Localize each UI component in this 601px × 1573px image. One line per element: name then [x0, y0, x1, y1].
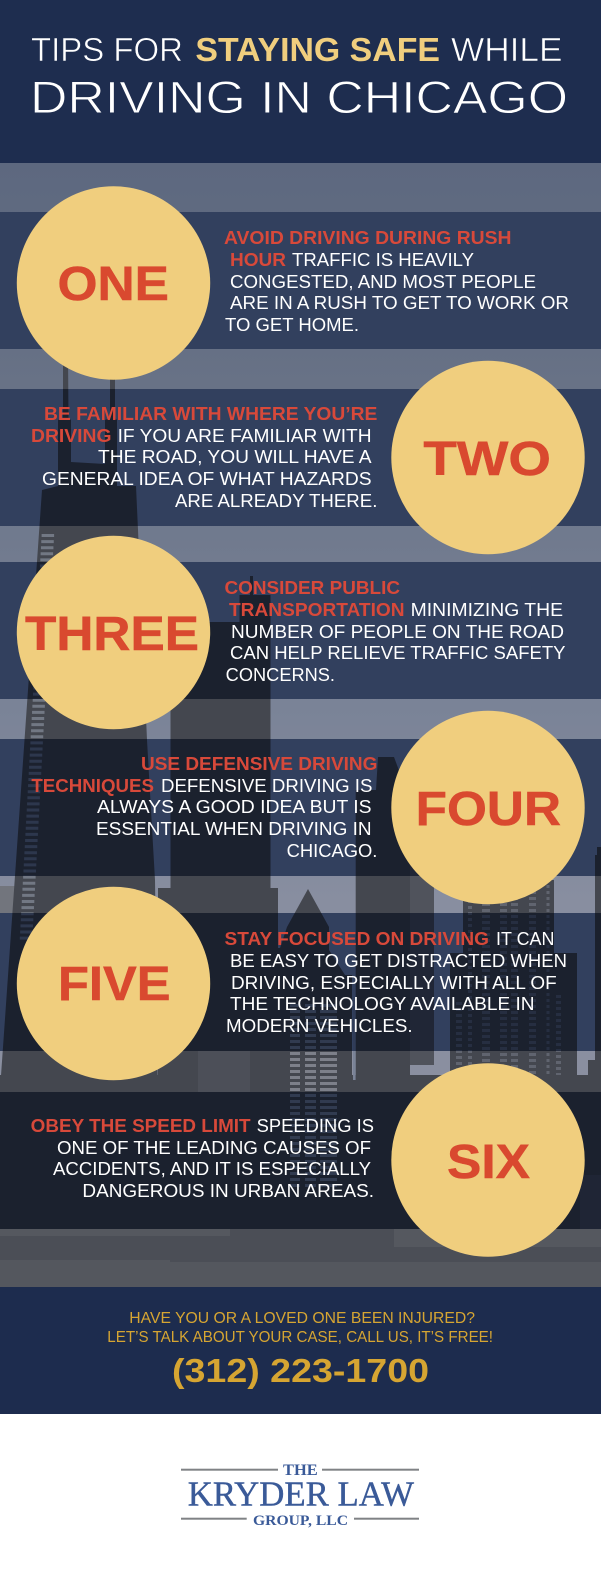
text: tip five: BE EASY TO GET DISTRACTED WHEN [230, 951, 567, 971]
logo [181, 1462, 419, 1529]
text: tip three: MINIMIZING THE [411, 600, 563, 620]
text: tip one: HOUR [230, 250, 286, 270]
text: tip one: TRAFFIC IS HEAVILY [292, 250, 474, 270]
text: tip four [31, 754, 377, 861]
text: tip four: DEFENSIVE DRIVING IS [161, 776, 372, 796]
text: tip two: ARE ALREADY THERE. [175, 491, 377, 511]
call to action text: HAVE YOU OR A LOVED ONE BEEN INJURED? [129, 1310, 475, 1327]
text: tip one: ARE IN A RUSH TO GET TO WORK OR [230, 293, 569, 313]
text: tip three: TRANSPORTATION [229, 600, 405, 620]
right cluster windows [459, 885, 558, 1075]
text: tip six: ONE OF THE LEADING CAUSES OF [57, 1138, 371, 1158]
text: tip two: IF YOU ARE FAMILIAR WITH [118, 426, 372, 446]
badge: five [17, 887, 210, 1080]
badge: four: FOUR [416, 783, 561, 836]
badge: six: SIX [447, 1136, 530, 1189]
text: tip six: OBEY THE SPEED LIMIT [31, 1116, 251, 1136]
text: tip one: TO GET HOME. [225, 315, 359, 335]
text: tip four: ESSENTIAL WHEN DRIVING IN [96, 819, 372, 839]
far right tower [595, 847, 601, 1060]
title: TIPS FOR [31, 31, 183, 68]
phone number: (312) 223-1700 [172, 1352, 429, 1389]
badge: two: TWO [423, 433, 551, 486]
logo: GROUP, LLC [253, 1513, 348, 1529]
building: spire tower [270, 889, 352, 1100]
text: tip two: DRIVING [31, 426, 112, 446]
badge: one [17, 186, 210, 380]
badge: four [391, 711, 585, 904]
panel: tip two [0, 361, 601, 554]
text: tip one: CONGESTED, AND MOST PEOPLE [230, 272, 536, 292]
spire tower windows [295, 1004, 328, 1190]
badge: five: FIVE [58, 958, 170, 1011]
building: center right tower [356, 757, 410, 1100]
title [30, 31, 568, 123]
text: tip four: TECHNIQUES [31, 776, 154, 796]
text: tip one [224, 228, 569, 335]
text: tip two: THE ROAD, YOU WILL HAVE A [98, 447, 372, 467]
badge: three: THREE [25, 608, 199, 661]
text: tip four: ALWAYS A GOOD IDEA BUT IS [97, 797, 372, 817]
title: WHILE [451, 31, 562, 68]
building: right cluster [450, 880, 577, 1075]
ground [0, 1000, 601, 1287]
text: tip three: CONCERNS. [226, 665, 335, 685]
panel: tip six [0, 1063, 601, 1257]
building: middle tower [158, 576, 278, 1100]
text: tip six: ACCIDENTS, AND IT IS ESPECIALLY [53, 1159, 371, 1179]
text: tip five: DRIVING, ESPECIALLY WITH ALL OF [231, 973, 557, 993]
text: tip five: IT CAN [496, 929, 554, 949]
title: STAYING SAFE [195, 31, 440, 68]
sky background [0, 163, 601, 1287]
text: tip four: USE DEFENSIVE DRIVING [141, 754, 377, 774]
title: DRIVING IN CHICAGO [30, 72, 568, 123]
panel: tip four [0, 711, 601, 904]
badge: one: ONE [58, 258, 169, 311]
badge: three [17, 536, 210, 729]
text: tip two [31, 404, 377, 511]
text: tip five: THE TECHNOLOGY AVAILABLE IN [230, 994, 534, 1014]
text: tip three [224, 578, 566, 685]
badge: six [391, 1063, 585, 1257]
logo: THE [283, 1462, 318, 1479]
text: tip two: GENERAL IDEA OF WHAT HAZARDS [42, 469, 372, 489]
building: hancock tower [0, 355, 158, 1100]
chicago skyline silhouette [0, 355, 601, 1287]
panel: tip five [0, 887, 601, 1080]
text: tip five: MODERN VEHICLES. [226, 1016, 413, 1036]
text: tip three: NUMBER OF PEOPLE ON THE ROAD [231, 622, 564, 642]
hancock windows [20, 534, 54, 940]
text: tip five [224, 929, 567, 1036]
text: tip five: STAY FOCUSED ON DRIVING [224, 929, 489, 949]
call to action panel [0, 1287, 601, 1414]
text: tip two: BE FAMILIAR WITH WHERE YOU’RE [44, 404, 377, 424]
panel: tip three [0, 536, 601, 729]
text: tip six: DANGEROUS IN URBAN AREAS. [82, 1181, 374, 1201]
logo: KRYDER LAW [188, 1475, 414, 1514]
text: tip four: CHICAGO. [287, 841, 377, 861]
call to action text [107, 1310, 493, 1346]
panel: tip one [0, 186, 601, 380]
badge: two [391, 361, 585, 554]
text: tip three: CAN HELP RELIEVE TRAFFIC SAFETY [230, 643, 566, 663]
header panel [0, 0, 601, 163]
call to action text: LET’S TALK ABOUT YOUR CASE, CALL US, IT’S FREE! [107, 1329, 493, 1346]
text: tip three: CONSIDER PUBLIC [224, 578, 400, 598]
text: tip six: SPEEDING IS [257, 1116, 374, 1136]
text: tip six [31, 1116, 374, 1201]
text: tip one: AVOID DRIVING DURING RUSH [224, 228, 512, 248]
